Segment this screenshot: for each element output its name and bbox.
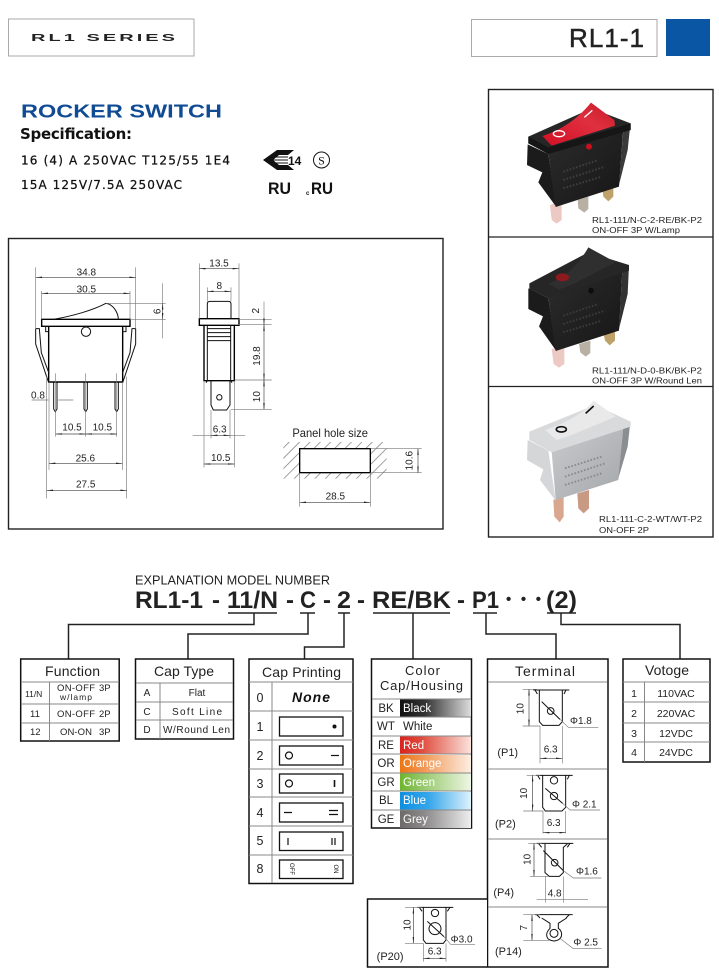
front view drawing: 30.5	[77, 284, 96, 295]
certification marks: RU	[268, 179, 291, 198]
table: color cap/housing: White	[403, 721, 432, 733]
model number code: 2	[337, 587, 351, 614]
panel: product photos	[488, 90, 713, 537]
table: cap printing: 8	[257, 862, 264, 876]
side view height dimensions: 19.8	[252, 346, 263, 366]
table: color cap/housing: WT	[377, 721, 395, 733]
terminal P14: Φ 2.5	[573, 937, 598, 948]
model number code: P1	[472, 587, 499, 614]
table: color cap/housing: Orange	[403, 758, 441, 770]
table: cap printing: 4	[257, 806, 264, 820]
terminal P4: Φ1.6	[576, 867, 598, 878]
table: cap type: Flat	[189, 688, 206, 699]
specification text: 16 (4) A 250VAC T125/55 1E4	[21, 154, 230, 168]
side view drawing: 8	[217, 281, 223, 292]
table: color cap/housing: BL	[379, 795, 394, 807]
terminal P1: Φ1.8	[570, 716, 592, 727]
table: cap printing: 2	[257, 749, 264, 763]
table: cap printing: None	[292, 689, 330, 705]
terminal P14: 7	[519, 924, 530, 930]
caption: black round lens switch: ON-OFF 3P W/Round Len	[592, 376, 702, 386]
table: voltage: 4	[631, 747, 637, 759]
table: voltage: 110VAC	[657, 688, 695, 700]
photo: red lamp switch	[527, 103, 631, 224]
model number code: -	[212, 587, 220, 614]
table: function: 3P	[99, 727, 111, 738]
model number code: C	[300, 587, 316, 614]
product heading: ROCKER SWITCH	[21, 102, 222, 122]
model number code	[135, 587, 577, 614]
table: color cap/housing: GE	[378, 814, 395, 826]
table: voltage: 3	[631, 728, 637, 740]
table: color cap/housing: Green	[403, 777, 435, 789]
terminal P2: (P2)	[495, 819, 516, 831]
table: function: 11/N	[25, 689, 42, 699]
table: cap printing: 0	[257, 691, 264, 705]
table: function	[21, 659, 119, 741]
table: function: Function	[45, 663, 100, 679]
printing icon 1	[280, 717, 343, 736]
terminal P20: Φ3.0	[451, 935, 473, 946]
terminal P14: (P14)	[495, 946, 522, 958]
table: function: ON-ON	[60, 727, 92, 738]
caption: black round lens switch	[592, 366, 702, 386]
caption: red lamp switch: ON-OFF 3P W/Lamp	[592, 225, 680, 235]
front view drawing: 6	[152, 308, 163, 314]
table: color cap/housing: Blue	[403, 795, 426, 807]
terminal P14	[495, 915, 602, 958]
terminal P20: 10	[403, 919, 414, 931]
table: cap printing: Cap Printing	[262, 664, 341, 680]
front view drawing	[31, 267, 166, 498]
printing icon 5	[280, 832, 343, 850]
table: voltage	[623, 659, 710, 762]
table: color cap/housing: Black	[403, 703, 431, 715]
model number code: 11/N	[227, 587, 278, 614]
table: voltage: 12VDC	[659, 728, 693, 740]
table: cap printing	[249, 659, 353, 884]
table: color cap/housing: Grey	[403, 814, 428, 826]
table: voltage: 220VAC	[657, 708, 696, 720]
table: cap type: A	[144, 688, 151, 699]
series label box: RL1 SERIES	[31, 33, 175, 44]
table: color cap/housing: Red	[403, 740, 424, 752]
model number code: -	[286, 587, 294, 614]
front view drawing: 10.5	[62, 423, 82, 434]
table: function: 11	[30, 709, 40, 720]
terminal P1: 6.3	[544, 744, 558, 755]
photo: white switch	[527, 401, 631, 522]
caption: white switch	[599, 514, 702, 535]
model title box: RL1-1	[569, 23, 644, 53]
explanation heading: EXPLANATION MODEL NUMBER	[135, 574, 330, 588]
table: terminal P20 box	[368, 899, 487, 967]
terminal P1: 10	[515, 703, 526, 714]
printing icon 2	[280, 746, 343, 765]
specification text: 15A 125V/7.5A 250VAC	[21, 178, 182, 192]
table: function: 12	[30, 727, 41, 738]
caption: red lamp switch	[592, 215, 702, 235]
table: cap printing: 1	[257, 720, 264, 734]
caption: white switch: ON-OFF 2P	[599, 525, 649, 535]
photo: black round lens switch	[528, 247, 629, 368]
model number code: RL1-1	[135, 587, 203, 614]
side view height dimensions: 10	[252, 391, 263, 402]
table: color cap/housing: OR	[377, 758, 395, 770]
table: voltage: 24VDC	[659, 747, 693, 759]
terminal P20	[377, 907, 475, 963]
terminal P1: (P1)	[497, 747, 518, 759]
specification text: Specification:	[20, 125, 132, 143]
side view drawing	[193, 259, 245, 467]
certification marks: RU	[311, 179, 333, 198]
model title box	[472, 20, 657, 56]
certification marks: S	[318, 154, 325, 168]
table: color cap/housing: Color	[405, 663, 441, 678]
terminal P2: Φ 2.1	[572, 799, 597, 810]
terminal P4	[493, 843, 601, 903]
table: color cap/housing: GR	[377, 777, 395, 789]
printing icon 8	[280, 860, 343, 878]
series label box	[8, 19, 194, 56]
printing icon 4	[280, 803, 343, 822]
panel hole size diagram: Panel hole size	[292, 427, 368, 440]
terminal P4: 10	[523, 853, 534, 865]
table: cap type: Soft Line	[172, 707, 222, 718]
table: cap type: C	[143, 707, 151, 718]
terminal P20: (P20)	[377, 951, 404, 963]
front view drawing: 10.5	[93, 423, 112, 434]
terminal P4: 4.8	[548, 889, 562, 900]
table: cap printing: 3	[257, 777, 264, 791]
certification marks: c	[306, 191, 310, 197]
printing icon 3	[280, 774, 343, 793]
front view drawing: 0.8	[31, 390, 45, 401]
caption: white switch: RL1-111-C-2-WT/WT-P2	[599, 514, 702, 524]
caption: red lamp switch: RL1-111/N-C-2-RE/BK-P2	[592, 215, 702, 225]
certification marks	[263, 150, 333, 198]
terminal P2: 10	[519, 787, 530, 799]
table: function: 2P	[99, 709, 111, 720]
table: cap type	[136, 659, 234, 739]
certification marks: 14	[288, 154, 302, 168]
table: color cap/housing: BK	[378, 703, 394, 715]
printing icon 8: ON	[332, 864, 338, 874]
front view drawing: 34.8	[77, 268, 96, 279]
table: color cap/housing: Cap/Housing	[380, 678, 463, 693]
table: function: ON-OFF	[57, 683, 95, 694]
side view drawing: 10.5	[211, 453, 231, 464]
panel: technical drawing	[8, 238, 443, 529]
panel hole size diagram: 28.5	[326, 491, 345, 502]
terminal P20: 6.3	[428, 947, 442, 958]
table: terminal: Terminal	[515, 663, 575, 679]
table: color cap/housing: RE	[378, 740, 394, 752]
table: voltage: Votoge	[645, 662, 689, 678]
terminal P2: 6.3	[547, 818, 561, 829]
panel hole size diagram: 10.6	[405, 451, 416, 470]
terminal P2	[495, 775, 600, 833]
table: cap type: D	[143, 725, 151, 736]
terminal P1	[497, 689, 598, 763]
model number code: -	[357, 587, 365, 614]
terminal P4: (P4)	[493, 887, 514, 899]
table: voltage: 2	[631, 708, 637, 720]
table: function: 3P	[99, 683, 111, 694]
model number code: RE/BK	[372, 587, 452, 614]
table: color cap/housing	[372, 659, 472, 828]
model number code: •••	[506, 591, 541, 608]
model number code: -	[457, 587, 465, 614]
table: voltage: 1	[631, 688, 637, 700]
table: cap type: Cap Type	[154, 663, 214, 679]
front view drawing: 27.5	[76, 479, 96, 490]
table: cap printing: 5	[257, 834, 264, 848]
table: terminal	[488, 659, 608, 967]
side view drawing: 13.5	[209, 259, 229, 270]
table: cap type: W/Round Len	[163, 725, 230, 736]
table: function: ON-OFF	[57, 709, 95, 720]
panel hole size diagram	[283, 427, 422, 507]
printing icon 8: OFF	[288, 863, 294, 875]
caption: black round lens switch: RL1-111/N-D-0-BK/BK-P2	[592, 366, 702, 376]
blue square accent	[666, 19, 710, 56]
table: function: w/lamp	[59, 692, 92, 702]
side view height dimensions	[231, 302, 272, 409]
specification text	[20, 125, 230, 192]
model number code: -	[323, 587, 331, 614]
side view drawing: 6.3	[213, 424, 227, 435]
front view drawing: 25.6	[76, 453, 95, 464]
side view height dimensions: 2	[251, 307, 262, 313]
connector lines from code to tables	[68, 613, 680, 659]
model number code: (2)	[546, 587, 577, 614]
